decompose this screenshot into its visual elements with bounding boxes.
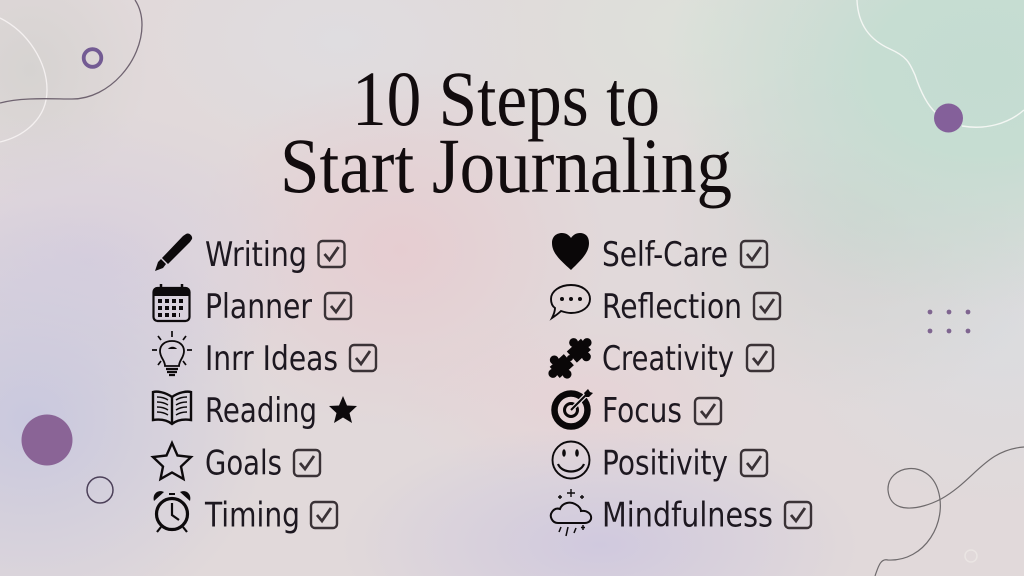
decoration: top-left curves [0, 0, 142, 142]
item: Writing [155, 233, 344, 275]
decoration: left small ring [87, 477, 113, 503]
item: Timing: Timing [204, 496, 300, 536]
title: 10 Steps to [352, 55, 660, 142]
item: Planner [153, 284, 351, 327]
title [280, 55, 732, 209]
item: Focus: Focus [602, 391, 682, 431]
item: Creativity [541, 330, 773, 387]
decoration: left large dot [22, 414, 72, 466]
item: Self-Care [552, 233, 767, 275]
item: Positivity [552, 442, 767, 484]
item: Inrr Ideas: Inrr Ideas [205, 339, 338, 379]
item: Reading: Reading [205, 391, 317, 431]
item: Writing: Writing [205, 235, 307, 275]
item: Goals [153, 443, 320, 484]
item: Timing [154, 491, 337, 536]
item: Inrr Ideas [152, 331, 376, 379]
item: Focus [554, 389, 721, 431]
item: Reading [153, 391, 357, 431]
item: Mindfulness: Mindfulness [602, 496, 773, 536]
decoration: top-left ring [84, 49, 101, 67]
item: Mindfulness [551, 489, 811, 536]
item: Creativity: Creativity [602, 339, 734, 379]
decoration: top-right curve [857, 0, 1024, 127]
item: Positivity: Positivity [602, 444, 728, 484]
decoration: bottom-right curve [875, 447, 1024, 576]
list: right column [541, 233, 811, 536]
item: Goals: Goals [205, 444, 282, 484]
decoration: top-right dot [934, 104, 963, 132]
decoration: dot grid [928, 310, 970, 333]
item: Reflection: Reflection [602, 287, 742, 327]
list: left column [152, 233, 376, 536]
title: Start Journaling [280, 122, 732, 209]
faint watermark [965, 550, 977, 562]
item: Self-Care: Self-Care [602, 235, 728, 275]
item: Planner: Planner [205, 287, 312, 327]
